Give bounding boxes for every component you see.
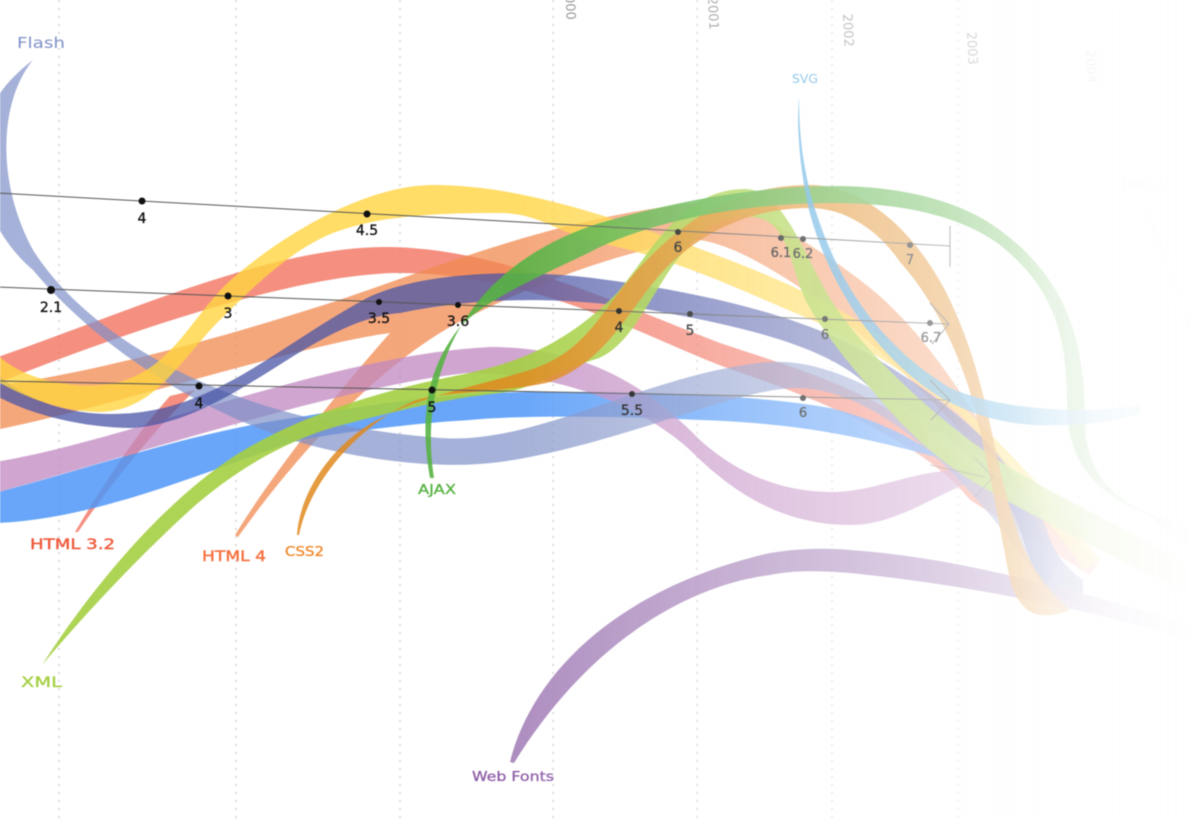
ribbon: blue browser <box>0 392 940 523</box>
label: Canvas: Canvas <box>1122 177 1165 191</box>
version line: top browser: 4 <box>138 211 147 227</box>
label: XML: XML <box>21 675 62 691</box>
version line: lower browser: 4 <box>195 396 204 412</box>
year labels: 2004 <box>1082 49 1099 83</box>
version line: top browser: 7 <box>906 253 914 268</box>
ribbon: XML <box>42 189 1200 665</box>
version line: lower browser: 6 <box>799 406 807 421</box>
version line: middle browser: 2.1 <box>40 300 62 316</box>
ribbon: AJAX <box>425 186 1200 560</box>
version line: lower browser <box>0 380 950 421</box>
version line: middle browser: 6 <box>821 328 829 343</box>
version line: fourth arrow <box>930 458 993 497</box>
label: Web Fonts: Web Fonts <box>472 770 554 785</box>
version line: middle browser: 5 <box>686 323 694 339</box>
version line: top browser <box>0 193 950 268</box>
ribbon: HTML 4 <box>0 203 1090 550</box>
label: HTML 3.2: HTML 3.2 <box>30 537 115 553</box>
ribbon: SVG <box>798 97 1140 425</box>
ribbon: dark blue browser <box>0 273 1083 603</box>
year labels: 2003 <box>963 31 980 65</box>
ribbon: yellow browser <box>0 185 1100 570</box>
ribbon: Flash <box>0 60 1060 590</box>
version line: lower browser: 5 <box>428 400 436 416</box>
version line: top browser: 6.1 <box>771 246 791 261</box>
year labels: 2002 <box>839 13 856 47</box>
version line: middle browser <box>0 286 949 346</box>
ribbon: Canvas <box>1145 205 1195 350</box>
version line: middle browser: 3.6 <box>447 314 469 330</box>
version line: top browser: 4.5 <box>356 223 378 239</box>
ribbon: HTML 3.2 <box>0 247 1100 575</box>
version line: top browser: 6 <box>674 240 683 256</box>
version line: middle browser: 3 <box>224 306 232 322</box>
label: CSS2: CSS2 <box>285 545 324 560</box>
version line: middle browser: 3.5 <box>368 311 390 327</box>
label: AJAX: AJAX <box>418 483 456 498</box>
ribbon: CSS2 <box>297 185 1070 615</box>
version line: middle browser: 6.7 <box>921 331 941 346</box>
version line: lower browser: 5.5 <box>621 403 643 419</box>
year labels <box>561 0 1099 83</box>
version line: middle browser: 4 <box>615 320 624 336</box>
label: Flash: Flash <box>17 34 65 52</box>
ribbon: Web Fonts <box>510 549 1200 763</box>
label: HTML 4: HTML 4 <box>202 549 266 565</box>
label: SVG: SVG <box>792 72 818 86</box>
version line: top browser: 6.2 <box>793 247 813 262</box>
ribbon: purple browser <box>0 347 988 525</box>
